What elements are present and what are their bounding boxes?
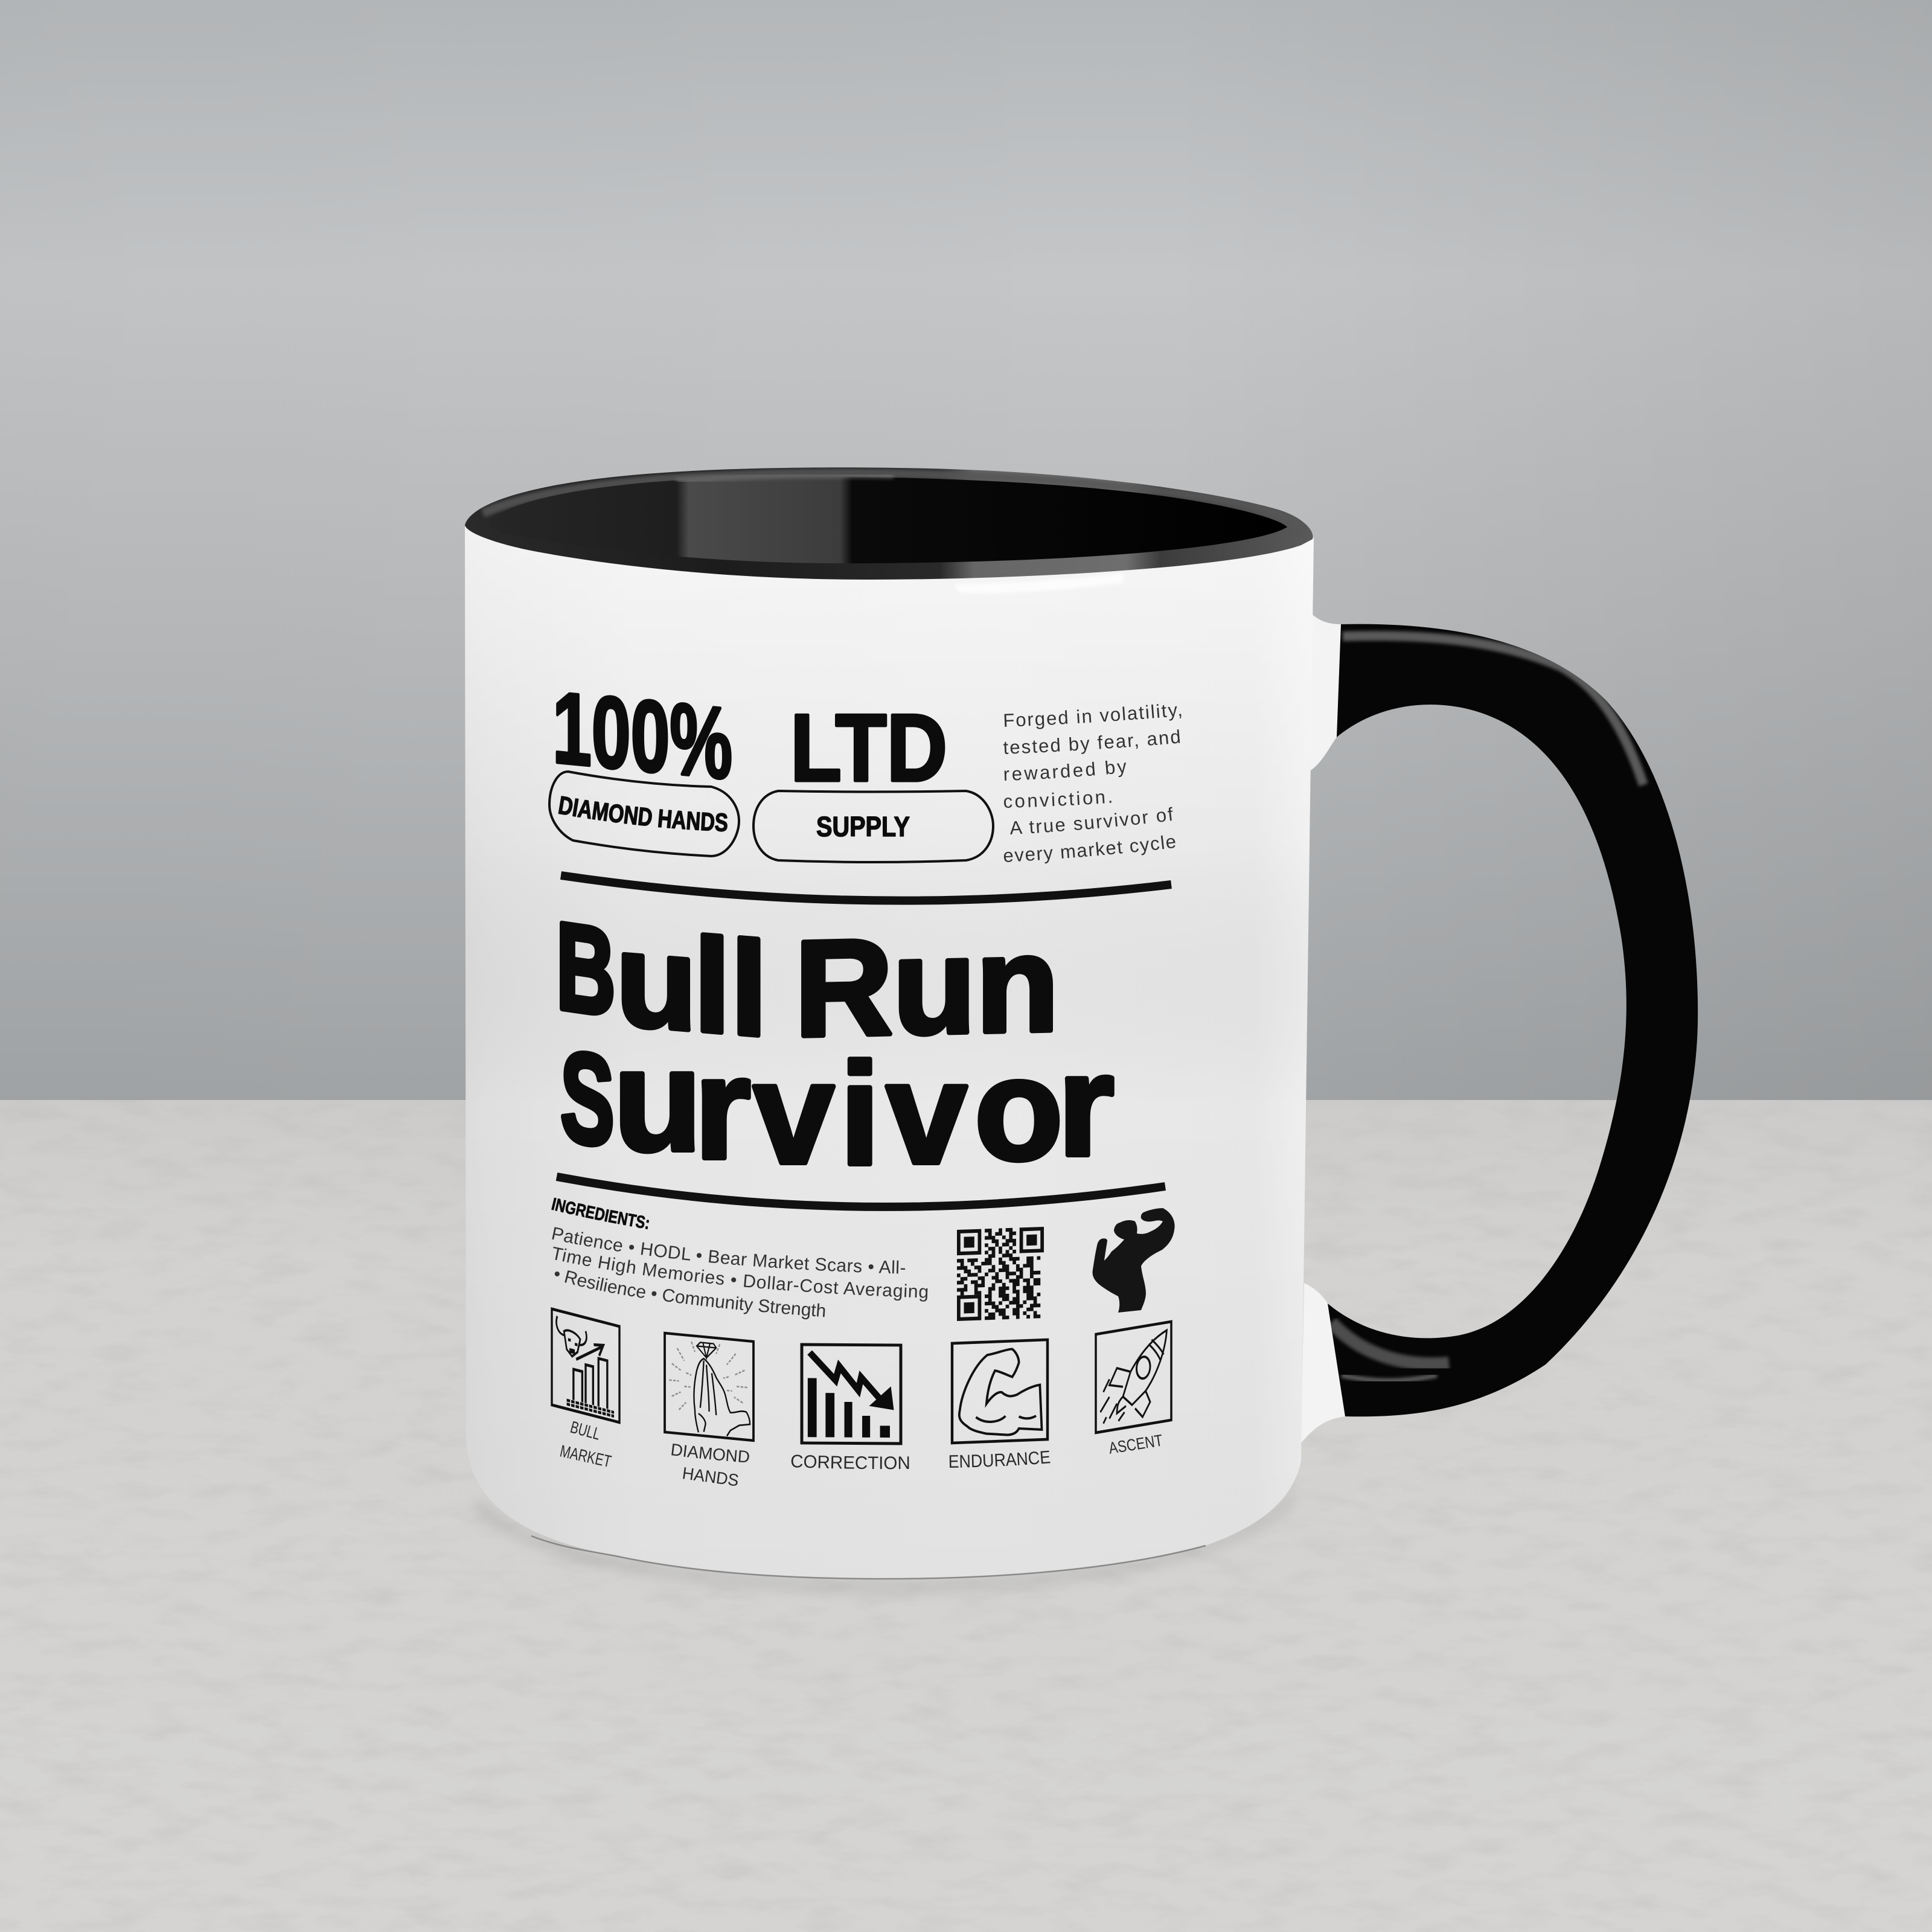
title: Run	[795, 906, 1059, 1065]
label: bull market: BULL	[570, 1421, 599, 1440]
mug rim and interior	[465, 467, 1313, 580]
title: B	[556, 896, 615, 1043]
icon: endurance flexed arm	[952, 1340, 1048, 1443]
label: diamond hands	[670, 1440, 750, 1490]
title	[556, 896, 1114, 1195]
lower divider rule	[557, 1177, 1165, 1207]
description paragraph: A true survivor of	[1010, 807, 1172, 834]
tabletop surface	[0, 1100, 1932, 1932]
handle white attachments	[1301, 610, 1345, 1443]
label: diamond hands: DIAMOND	[670, 1440, 750, 1467]
description paragraph: conviction.	[1004, 791, 1112, 808]
bars	[574, 1352, 607, 1409]
background wall	[0, 0, 1932, 1105]
rim outer	[465, 467, 1313, 580]
icon: flexing bodybuilder silhouette	[1092, 1208, 1175, 1313]
stat: 100%: 100%	[552, 670, 732, 801]
label: diamond hands: HANDS	[681, 1463, 740, 1490]
handle highlights	[1331, 636, 1643, 1381]
label artwork	[549, 670, 1183, 1490]
icon: bull market	[552, 1309, 619, 1422]
rising arrow	[576, 1339, 603, 1366]
muscle lines	[976, 1415, 1036, 1422]
description paragraph: Forged in volatility,	[1005, 704, 1181, 729]
pill: diamond hands	[549, 772, 739, 856]
title: S	[560, 1023, 615, 1174]
pill: supply	[753, 791, 993, 862]
interior rim glint	[676, 475, 894, 481]
label: ascent: ASCENT	[1107, 1431, 1164, 1457]
icon: correction chart	[802, 1345, 901, 1444]
icon: ascent rocket	[1096, 1322, 1171, 1433]
falling bars	[808, 1378, 890, 1438]
label: bull market	[558, 1418, 613, 1471]
rocket body	[1123, 1330, 1166, 1407]
ingredients block: Patience • HODL • Bear Market Scars • All-	[552, 1227, 906, 1274]
exhaust streaks	[1100, 1377, 1124, 1424]
top divider rule	[561, 875, 1171, 901]
mug handle	[1301, 610, 1698, 1443]
label: correction: CORRECTION	[790, 1451, 910, 1473]
praying hands	[694, 1358, 750, 1438]
radiating rays	[669, 1340, 747, 1416]
mug body	[465, 525, 1314, 1579]
fins	[1110, 1363, 1150, 1422]
ingredients block: Time High Memories • Dollar-Cost Averaging	[553, 1246, 927, 1302]
base contact line	[531, 1536, 1206, 1579]
title: ull	[616, 904, 767, 1064]
title: urvivor	[613, 1019, 1114, 1195]
bull head	[557, 1316, 586, 1360]
arm outline	[959, 1348, 1042, 1437]
description paragraph	[1002, 699, 1183, 866]
stat: LTD: LTD	[790, 695, 947, 801]
ingredients block: INGREDIENTS:	[551, 1198, 650, 1229]
pill: supply: SUPPLY	[816, 811, 910, 842]
description paragraph: tested by fear, and	[1003, 729, 1180, 754]
handle black loop	[1328, 624, 1698, 1416]
QR code	[957, 1229, 1042, 1319]
falling arrow	[810, 1352, 881, 1400]
porthole	[1136, 1355, 1150, 1380]
diamond	[697, 1342, 716, 1359]
pill: diamond hands: DIAMOND HANDS	[558, 796, 728, 832]
ingredients block: • Resilience • Community Strength	[554, 1270, 825, 1320]
mug glaze highlight	[954, 574, 1123, 593]
ingredients block	[549, 1195, 929, 1321]
nose stripes	[1148, 1338, 1164, 1363]
description paragraph: rewarded by	[1005, 761, 1126, 781]
chart base	[567, 1400, 614, 1416]
interior opening	[489, 477, 1287, 563]
icon: diamond hands	[665, 1333, 753, 1441]
description paragraph: every market cycle	[1003, 836, 1176, 863]
rim top sheen	[481, 467, 1288, 518]
label: bull market: MARKET	[560, 1445, 612, 1467]
label: endurance: ENDURANCE	[948, 1447, 1051, 1472]
